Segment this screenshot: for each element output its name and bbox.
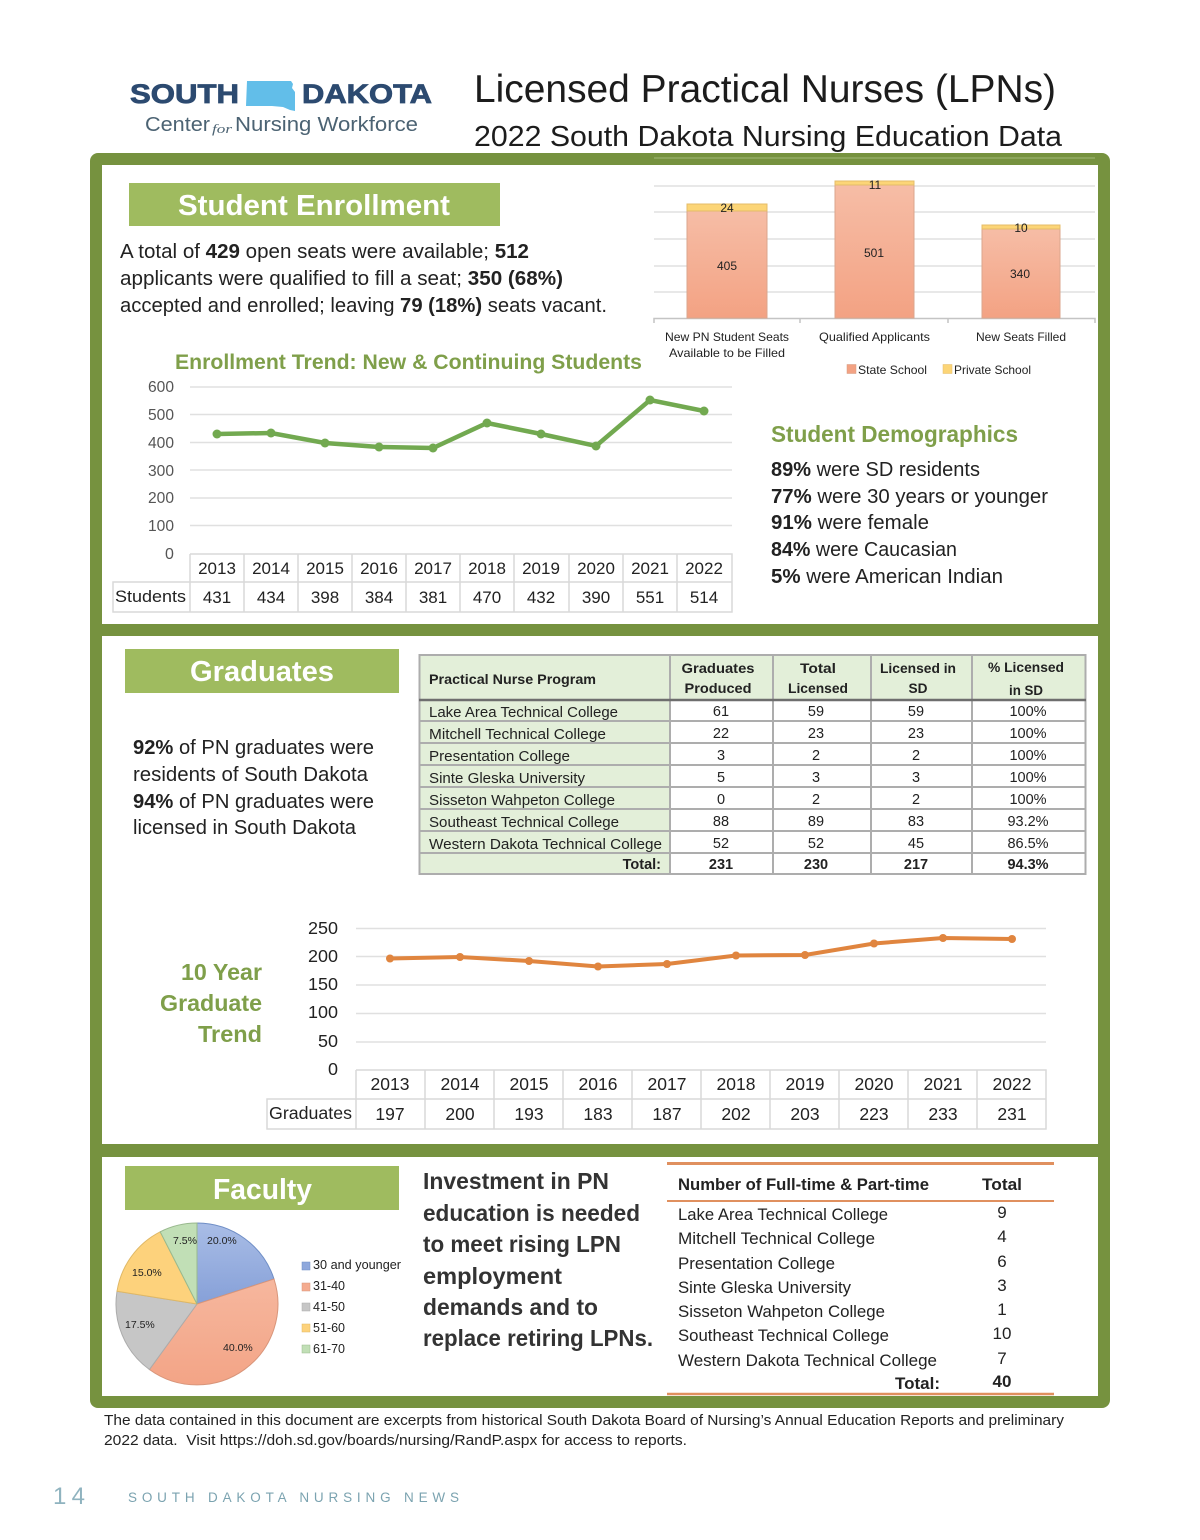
data table: graduates by year	[267, 1070, 1046, 1129]
heading: 10 year graduate trend	[160, 959, 262, 1047]
data table: students by year: 2018	[468, 559, 506, 578]
table body rows: 9	[997, 1203, 1007, 1222]
table body rows: Lake Area Technical College	[429, 705, 618, 721]
text block: investment call to action: to meet rising LPN	[423, 1231, 621, 1257]
data table: students by year	[113, 554, 732, 612]
bar chart category labels: Available to be Filled	[669, 346, 785, 360]
axis labels: 200	[148, 490, 174, 507]
bar chart legend: State School	[858, 363, 927, 377]
line series: students	[212, 396, 708, 452]
data table: graduates by year: 187	[652, 1104, 682, 1124]
axis labels: 50	[318, 1031, 338, 1051]
table body rows: 100%	[1009, 748, 1047, 764]
table body rows: Mitchell Technical College	[678, 1229, 875, 1248]
text block: student demographics: 5% were American Indian	[771, 566, 1003, 588]
table total row: Total:	[895, 1374, 940, 1393]
table: graduates by practical nurse program	[419, 655, 1086, 874]
text block: graduates summary	[133, 737, 374, 839]
text block: student demographics	[771, 421, 1048, 588]
data table: graduates by year: 197	[375, 1104, 405, 1124]
table body rows: 23	[808, 726, 824, 742]
data table: graduates by year: 203	[790, 1104, 820, 1124]
data table: students by year: 2021	[631, 559, 669, 578]
table body rows: 1	[997, 1300, 1007, 1319]
table header row: Number of Full-time & Part-time	[678, 1176, 929, 1194]
data table: graduates by year: 2020	[855, 1074, 894, 1094]
table body rows: 2	[912, 748, 920, 764]
pie legend	[302, 1258, 401, 1356]
bar: qualified applicants: 501	[864, 246, 884, 260]
table total row: 94.3%	[1007, 857, 1049, 873]
table body rows: 52	[713, 836, 729, 852]
pie labels: 7.5%	[173, 1235, 197, 1247]
pie legend: 30 and younger	[313, 1258, 401, 1272]
axis labels	[148, 379, 174, 563]
data table: students by year: 434	[257, 588, 285, 607]
table total row	[623, 857, 1049, 873]
data table: graduates by year: 2018	[717, 1074, 755, 1094]
data table: students by year: 2020	[577, 559, 615, 578]
data table: students by year: 431	[203, 588, 231, 607]
table body rows: 3	[812, 770, 820, 786]
pie legend: 31-40	[313, 1279, 345, 1293]
text block: enrollment summary	[120, 241, 607, 317]
table header row: Licensed	[788, 680, 848, 696]
table body rows: 7	[997, 1349, 1007, 1368]
table body rows: 10	[993, 1324, 1011, 1343]
table body rows: 100%	[1009, 704, 1047, 720]
logo: South Dakota Center for Nursing Workforce: Nursing Workforce	[235, 114, 418, 136]
panel: graduates	[102, 636, 1098, 1144]
data table: graduates by year: 200	[445, 1104, 475, 1124]
text block: graduates summary: residents of South Dakota	[133, 764, 369, 786]
data table: graduates by year: 2017	[648, 1074, 686, 1094]
table body rows: Southeast Technical College	[429, 815, 619, 831]
pie labels: 40.0%	[223, 1342, 253, 1354]
table body rows: Sinte Gleska University	[429, 771, 586, 787]
table body rows: Western Dakota Technical College	[429, 837, 662, 853]
table body rows: 59	[808, 704, 824, 720]
axis labels: 100	[308, 1002, 338, 1022]
axis labels: 100	[148, 518, 174, 535]
data table: students by year: 398	[311, 588, 339, 607]
logo: South Dakota Center for Nursing Workforce: for	[212, 121, 233, 136]
axis labels: 150	[308, 974, 338, 994]
data table: students by year: 432	[527, 588, 555, 607]
data table: graduates by year: 2014	[441, 1074, 480, 1094]
pie legend: 41-50	[313, 1300, 345, 1314]
axis labels: 400	[148, 435, 174, 452]
text block: investment call to action: employment	[423, 1263, 562, 1289]
table body rows	[429, 704, 1049, 853]
heading: student enrollment	[129, 183, 500, 226]
line chart: graduate trend	[267, 918, 1046, 1129]
heading: graduates	[125, 649, 399, 693]
data table: graduates by year: 2015	[510, 1074, 548, 1094]
text block: student demographics: 77% were 30 years or younger	[771, 486, 1048, 508]
text block: investment call to action: education is needed	[423, 1200, 640, 1226]
table body rows: Mitchell Technical College	[429, 727, 606, 743]
pie legend: 61-70	[313, 1342, 345, 1356]
pie labels: 15.0%	[132, 1267, 162, 1279]
table header row: SD	[908, 680, 928, 696]
data table: graduates by year: 233	[928, 1104, 958, 1124]
text block: graduates summary: licensed in South Dakota	[133, 817, 357, 839]
table body rows: 2	[812, 748, 820, 764]
table body rows: 59	[908, 704, 924, 720]
text block: enrollment summary: A total of 429 open seats were available; 512	[120, 241, 529, 263]
table header row: Produced	[684, 680, 752, 696]
data table: graduates by year: Graduates	[269, 1103, 352, 1123]
data table: students by year: 2013	[198, 559, 236, 578]
data table: students by year: 551	[636, 588, 664, 607]
heading: student enrollment: Student Enrollment	[178, 190, 450, 222]
table header row: Total	[982, 1176, 1022, 1194]
table body rows: 100%	[1009, 770, 1047, 786]
logo: South Dakota Center for Nursing Workforce	[130, 79, 432, 136]
bar: new seats filled: 340	[1010, 267, 1030, 281]
pie legend: 51-60	[313, 1321, 345, 1335]
table body rows: 2	[812, 792, 820, 808]
logo: South Dakota Center for Nursing Workforce: DAKOTA	[302, 79, 432, 109]
line series: graduates	[386, 934, 1016, 970]
publication name: SOUTH DAKOTA NURSING NEWS	[128, 1490, 459, 1505]
table header row: in SD	[1009, 682, 1043, 698]
text block: enrollment summary: applicants were qualified to fill a seat; 350 (68%)	[120, 268, 563, 290]
heading: 10 year graduate trend: Trend	[198, 1021, 262, 1047]
page number: 14	[53, 1483, 85, 1510]
table body rows: 4	[997, 1227, 1007, 1246]
table body rows: 52	[808, 836, 824, 852]
axis labels: 500	[148, 407, 174, 424]
axis labels: 250	[308, 918, 338, 938]
table total row: 230	[804, 857, 828, 873]
heading: faculty	[125, 1166, 399, 1210]
table body rows: 3	[717, 748, 725, 764]
data table: graduates by year: 2021	[924, 1074, 962, 1094]
table body rows: Lake Area Technical College	[678, 1205, 888, 1224]
table total row: 231	[709, 857, 733, 873]
bar: new PN student seats: 405	[717, 259, 737, 273]
text block: student demographics: 91% were female	[771, 512, 929, 534]
data table: graduates by year: 223	[859, 1104, 889, 1124]
table total row	[895, 1372, 1011, 1393]
table body rows: 61	[713, 704, 729, 720]
table body rows: 45	[908, 836, 924, 852]
text block: investment call to action: demands and to	[423, 1294, 598, 1320]
table body rows: Sinte Gleska University	[678, 1278, 851, 1297]
table body rows: 23	[908, 726, 924, 742]
heading: 10 year graduate trend: 10 Year	[181, 959, 262, 985]
pie chart: faculty age	[116, 1223, 278, 1385]
data table: students by year: 470	[473, 588, 501, 607]
text block: student demographics: 84% were Caucasian	[771, 539, 957, 561]
table total row: 40	[993, 1372, 1011, 1391]
pie labels: 20.0%	[207, 1235, 237, 1247]
bar chart legend	[847, 363, 1031, 377]
text block: graduates summary: 92% of PN graduates were	[133, 737, 374, 759]
data table: graduates by year: 202	[721, 1104, 751, 1124]
table header row: Licensed in	[880, 660, 956, 676]
table body rows: 0	[717, 792, 725, 808]
table total row: 217	[904, 857, 928, 873]
table body rows: 86.5%	[1007, 836, 1049, 852]
data table: graduates by year: 2019	[786, 1074, 824, 1094]
table body rows: 83	[908, 814, 924, 830]
table body rows: Sisseton Wahpeton College	[678, 1302, 885, 1321]
table body rows: 88	[713, 814, 729, 830]
bar: qualified applicants	[835, 178, 914, 318]
bar: new PN student seats: 24	[720, 201, 734, 215]
table total row: Total:	[623, 857, 661, 873]
heading: enrollment trend: Enrollment Trend: New & Continuing Students	[175, 351, 642, 374]
table body rows: 2	[912, 792, 920, 808]
text block: investment call to action	[423, 1168, 653, 1351]
axis labels: 0	[328, 1059, 338, 1079]
axis labels: 200	[308, 946, 338, 966]
data table: graduates by year: 183	[583, 1104, 613, 1124]
pie labels	[125, 1235, 253, 1354]
heading: graduates: Graduates	[190, 656, 334, 688]
bar: new seats filled	[982, 221, 1060, 318]
table header row	[429, 659, 1064, 698]
text block: investment call to action: replace retiring LPNs.	[423, 1325, 653, 1351]
footer note: 2022 data. Visit https://doh.sd.gov/boards/nursing/RandP.aspx for access to reports.	[104, 1433, 687, 1449]
data table: students by year: 2014	[252, 559, 290, 578]
axis labels: 0	[165, 546, 174, 563]
table body rows: 93.2%	[1007, 814, 1049, 830]
data table: graduates by year: 193	[514, 1104, 544, 1124]
text block: graduates summary: 94% of PN graduates were	[133, 791, 374, 813]
axis labels: 600	[148, 379, 174, 396]
bar chart category labels: Qualified Applicants	[819, 330, 930, 344]
table body rows: Western Dakota Technical College	[678, 1351, 937, 1370]
table body rows: 100%	[1009, 726, 1047, 742]
table body rows: Southeast Technical College	[678, 1326, 889, 1345]
data table: students by year: 2015	[306, 559, 344, 578]
title: Licensed Practical Nurses (LPNs)	[474, 68, 1056, 111]
bar: qualified applicants: 11	[869, 178, 882, 192]
line chart: enrollment trend	[113, 379, 732, 612]
table body rows	[678, 1203, 1011, 1370]
green frame	[90, 153, 1110, 1408]
table body rows: Sisseton Wahpeton College	[429, 793, 615, 809]
text block: enrollment summary: accepted and enrolled; leaving 79 (18%) seats vacant.	[120, 295, 607, 317]
data table: students by year: 381	[419, 588, 447, 607]
footer note	[104, 1413, 1065, 1449]
axis labels: 300	[148, 463, 174, 480]
table body rows: Presentation College	[429, 749, 570, 765]
pie labels: 17.5%	[125, 1319, 155, 1331]
subtitle: 2022 South Dakota Nursing Education Data	[474, 121, 1063, 153]
table body rows: 100%	[1009, 792, 1047, 808]
table body rows: 3	[997, 1276, 1007, 1295]
bar: new PN student seats	[687, 201, 767, 318]
table body rows: 5	[717, 770, 725, 786]
table header row: % Licensed	[988, 659, 1064, 675]
data table: students by year: 384	[365, 588, 393, 607]
axis labels	[308, 918, 338, 1079]
data table: students by year: 390	[582, 588, 610, 607]
table body rows: 89	[808, 814, 824, 830]
heading: 10 year graduate trend: Graduate	[160, 990, 262, 1016]
bar chart category labels	[665, 330, 1066, 360]
bar chart: seats, applicants, filled	[654, 178, 1095, 377]
table header row: Total	[800, 660, 836, 676]
logo: South Dakota Center for Nursing Workforce: Center	[145, 114, 210, 136]
table body rows: 6	[997, 1252, 1007, 1271]
bar chart category labels: New Seats Filled	[976, 330, 1066, 344]
bar: new seats filled: 10	[1014, 221, 1028, 235]
heading: faculty: Faculty	[213, 1174, 312, 1206]
table header row: Practical Nurse Program	[429, 671, 596, 687]
data table: graduates by year: 2016	[579, 1074, 617, 1094]
data table: students by year: 2017	[414, 559, 452, 578]
data table: students by year: 514	[690, 588, 718, 607]
panel: student enrollment	[102, 165, 1098, 624]
bar chart category labels: New PN Student Seats	[665, 330, 789, 344]
bar chart legend: Private School	[954, 363, 1031, 377]
table: faculty by program	[667, 1164, 1054, 1394]
text block: student demographics: 89% were SD residents	[771, 459, 980, 481]
table header row: Graduates	[682, 660, 755, 676]
data table: students by year: 2016	[360, 559, 398, 578]
data table: students by year: 2022	[685, 559, 723, 578]
table body rows: Presentation College	[678, 1254, 835, 1273]
table body rows: 22	[713, 726, 729, 742]
text block: student demographics: Student Demographics	[771, 421, 1018, 447]
footer note: The data contained in this document are excerpts from historical South Dakota Board of Nursing’s Annual Education Reports and preliminary	[104, 1413, 1065, 1429]
table body rows: 3	[912, 770, 920, 786]
data table: graduates by year: 2022	[993, 1074, 1031, 1094]
data table: students by year: Students	[115, 587, 186, 606]
logo: South Dakota Center for Nursing Workforce: SOUTH	[130, 79, 239, 109]
data table: graduates by year: 231	[997, 1104, 1027, 1124]
data table: students by year: 2019	[522, 559, 560, 578]
panel: faculty	[102, 1157, 1098, 1396]
text block: investment call to action: Investment in PN	[423, 1168, 609, 1194]
data table: graduates by year: 2013	[371, 1074, 409, 1094]
